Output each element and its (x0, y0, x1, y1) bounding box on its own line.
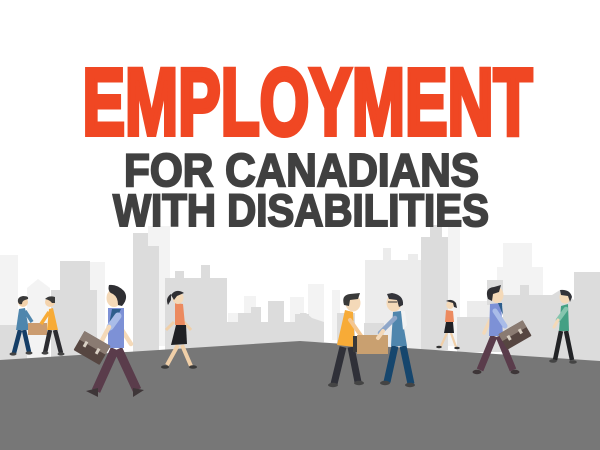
person: woman walking, left (161, 291, 197, 369)
subtitle (113, 144, 489, 236)
person: small man in blue carrying box (10, 296, 32, 356)
person: man with briefcase, left (74, 285, 144, 397)
box carried by small pair (28, 323, 47, 335)
person: small woman, right (436, 300, 460, 349)
subtitle: WITH DISABILITIES (113, 185, 489, 236)
person: small man in orange carrying box (41, 296, 64, 356)
person: man in blue carrying box, centre (378, 293, 415, 387)
person: man with briefcase, right (472, 285, 532, 374)
background skyline: pale far buildings (0, 226, 543, 360)
background skyline: mid buildings (365, 248, 497, 351)
ground (0, 341, 600, 450)
cardboard box, centre (357, 335, 388, 354)
person: man in green, right (549, 290, 577, 364)
subtitle: FOR CANADIANS (124, 144, 479, 196)
background skyline: near buildings (0, 225, 600, 362)
person: man in orange carrying box, centre (328, 293, 364, 387)
